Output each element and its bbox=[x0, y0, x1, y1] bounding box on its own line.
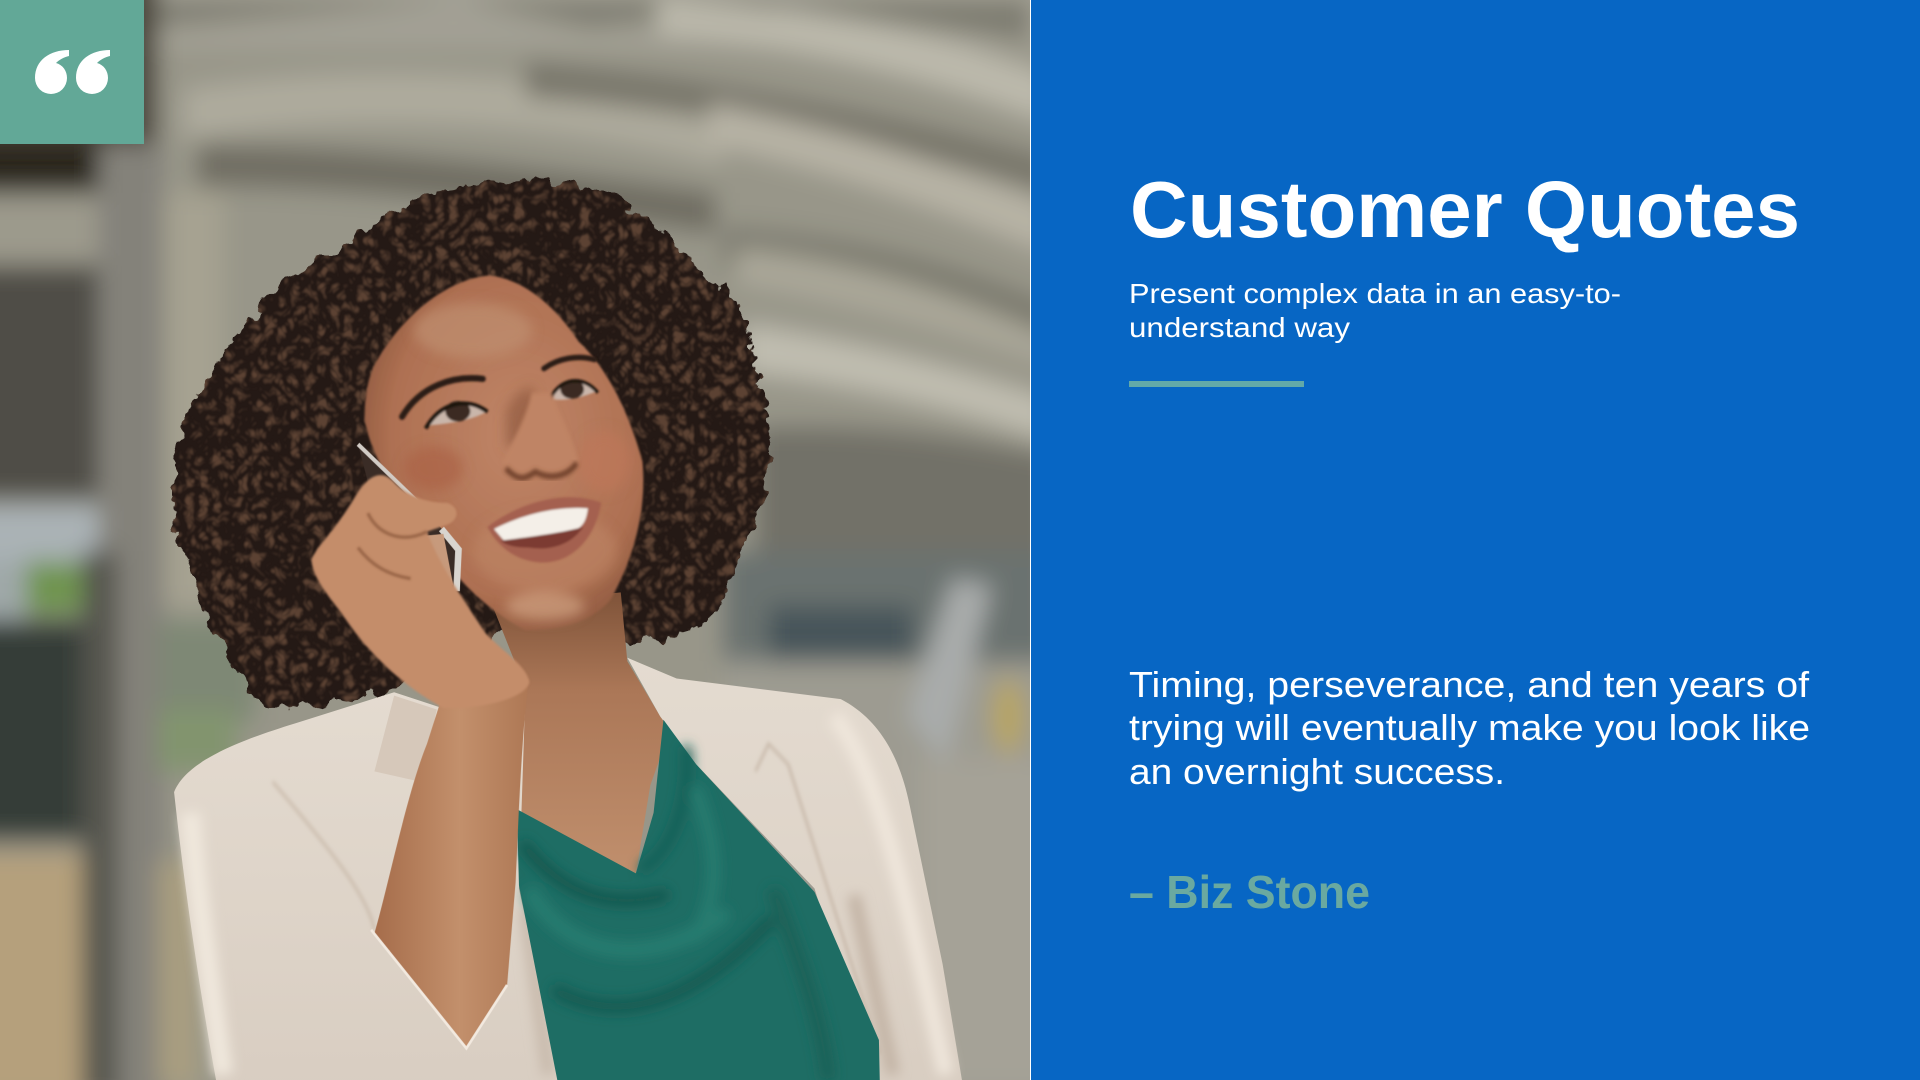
quote text: Timing, perseverance, and ten years of bbox=[1129, 664, 1810, 705]
attribution: – Biz Stone bbox=[1129, 866, 1370, 918]
subtitle: understand way bbox=[1129, 312, 1350, 343]
hair bbox=[172, 180, 769, 707]
quote text: trying will eventually make you look like bbox=[1129, 707, 1810, 748]
sleeve cuff bbox=[371, 930, 507, 1048]
divider accent bbox=[1129, 381, 1304, 387]
icon: quotation mark bbox=[35, 50, 110, 94]
green blouse bbox=[517, 720, 880, 1080]
hand bbox=[311, 475, 529, 708]
smile bbox=[487, 497, 601, 563]
phone bbox=[358, 444, 460, 592]
panel: blue text panel bbox=[1031, 0, 1920, 1080]
finger shadows bbox=[358, 513, 427, 579]
face bbox=[365, 276, 643, 630]
subtitle bbox=[1129, 278, 1621, 343]
nose bbox=[503, 393, 578, 478]
eyes and eyebrows bbox=[402, 357, 598, 428]
neck bbox=[493, 592, 670, 873]
blurred building background bbox=[0, 0, 1077, 1080]
quote text bbox=[1129, 664, 1810, 792]
quote icon box bbox=[0, 0, 144, 144]
quote text: an overnight success. bbox=[1129, 751, 1505, 792]
title: Customer Quotes bbox=[1130, 165, 1800, 254]
photo: smiling woman on the phone bbox=[0, 0, 1030, 1080]
forearm bbox=[374, 678, 529, 1048]
subtitle: Present complex data in an easy-to- bbox=[1129, 278, 1621, 309]
jacket bbox=[174, 658, 966, 1080]
